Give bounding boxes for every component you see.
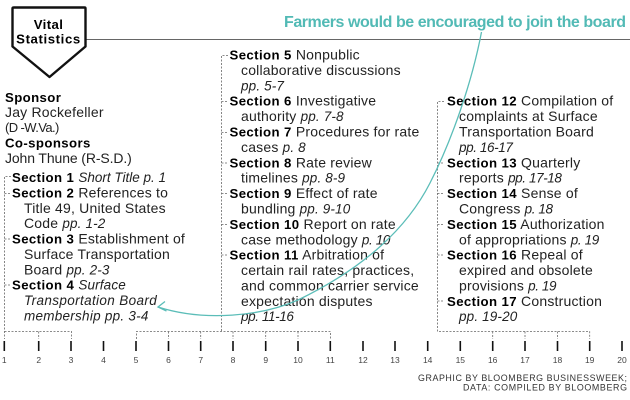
page axis numbers: 19 [585, 355, 595, 365]
section list: column 2: certain rail rates, practices, [241, 262, 414, 278]
sponsors block: Jay Rockefeller [5, 104, 104, 120]
section list: column 2: Section 11 Arbitration of [230, 247, 384, 263]
page axis numbers: 14 [423, 355, 433, 365]
credit line: GRAPHIC BY BLOOMBERG BUSINESSWEEK; [418, 373, 627, 383]
credit line: DATA: COMPILED BY BLOOMBERG [463, 382, 627, 392]
section list: column 2: Section 10 Report on rate [230, 216, 396, 232]
sponsors block: Sponsor [5, 90, 61, 105]
section list: column 3: Section 16 Repeal of [447, 247, 583, 263]
section list: column 1: membership pp. 3-4 [24, 308, 149, 324]
section list: column 2: cases p. 8 [241, 139, 306, 155]
page axis numbers: 3 [69, 355, 74, 365]
badge: Vital Statistics [12, 8, 86, 77]
page axis numbers: 1 [2, 355, 7, 365]
section list: column 1: Board pp. 2-3 [24, 261, 110, 277]
page axis numbers: 17 [520, 355, 530, 365]
badge: Vital Statistics: Statistics [16, 32, 81, 46]
section list: column 1: Section 2 References to [12, 184, 168, 200]
section list: column 2: Section 7 Procedures for rate [230, 124, 419, 140]
page axis numbers: 10 [293, 355, 303, 365]
section list: column 2: collaborative discussions [241, 62, 401, 78]
page axis numbers: 12 [358, 355, 368, 365]
section list: column 2: case methodology p. 10 [241, 231, 391, 247]
page axis numbers: 16 [488, 355, 498, 365]
page axis numbers: 7 [198, 355, 203, 365]
page axis numbers: 9 [263, 355, 268, 365]
page axis ticks [4, 341, 622, 351]
section list: column 3: Section 12 Compilation of [447, 93, 613, 109]
section list: column 2: bundling pp. 9-10 [241, 200, 351, 216]
section list: column 3: pp. 16-17 [458, 140, 513, 155]
bracket: column 2 to pages 5-11 [136, 56, 330, 339]
section list: column 3: of appropriations p. 19 [459, 231, 600, 247]
credit line [418, 373, 627, 392]
sponsors block [5, 90, 132, 166]
sponsors block: (D -W.Va.) [5, 120, 60, 135]
section list: column 2: timelines pp. 8-9 [241, 170, 346, 186]
section list: column 1: Transportation Board [24, 293, 157, 308]
page axis numbers: 6 [166, 355, 171, 365]
badge: Vital Statistics: Vital [34, 17, 63, 32]
section list: column 1: Title 49, United States [24, 200, 166, 216]
section list: column 2: pp. 5-7 [240, 78, 284, 93]
page axis numbers: 5 [134, 355, 139, 365]
section list: column 2: Section 5 Nonpublic [230, 46, 360, 62]
page axis numbers: 11 [326, 355, 335, 365]
section list: column 2 [230, 46, 419, 324]
section list: column 3: pp. 19-20 [458, 309, 518, 324]
page axis numbers [2, 355, 627, 365]
section list: column 1: Section 1 Short Title p. 1 [12, 169, 166, 185]
section list: column 3: Section 15 Authorization [447, 216, 605, 232]
section list: column 3: expired and obsolete [459, 262, 593, 278]
bracket: column 3 to pages 12-19 [438, 102, 590, 339]
page axis numbers: 8 [231, 355, 236, 365]
section list: column 2: expectation disputes [241, 293, 373, 309]
section list: column 3: reports pp. 17-18 [459, 170, 562, 186]
bracket: column 1 to pages 1-3 [4, 176, 72, 339]
section list: column 1: Surface Transportation [24, 246, 170, 262]
section list: column 3: complaints at Surface [459, 108, 598, 124]
section list: column 1: Code pp. 1-2 [24, 215, 106, 231]
section list: column 2: pp. 11-16 [240, 309, 294, 324]
page axis numbers: 15 [456, 355, 465, 365]
section list: column 2: and common carrier service [241, 278, 419, 294]
callout heading: Farmers would be encouraged to join the board [284, 14, 626, 31]
section list: column 1: Section 4 Surface [12, 277, 126, 293]
page axis numbers: 20 [617, 355, 627, 365]
section list: column 3: Transportation Board [459, 124, 594, 140]
section list: column 2: authority pp. 7-8 [241, 108, 344, 124]
section list: column 3: Section 13 Quarterly [447, 154, 580, 170]
section list: column 2: Section 8 Rate review [230, 154, 373, 170]
arrow: farmers callout to Section 4 [158, 32, 482, 316]
section list: column 1 [12, 169, 185, 324]
page axis numbers: 2 [36, 355, 41, 365]
section list: column 3: Section 17 Construction [447, 293, 602, 309]
page axis numbers: 18 [553, 355, 562, 365]
section list: column 3: Congress p. 18 [459, 200, 554, 216]
header rule [85, 38, 630, 40]
section list: column 2: Section 9 Effect of rate [230, 185, 378, 201]
section list: column 3: provisions p. 19 [459, 278, 557, 294]
sponsors block: Co-sponsors [5, 136, 91, 150]
section list: column 1: Section 3 Establishment of [12, 230, 185, 246]
section list: column 2: Section 6 Investigative [230, 93, 376, 109]
section list: column 3 [447, 93, 613, 324]
page axis numbers: 4 [101, 355, 106, 365]
page axis numbers: 13 [390, 355, 400, 365]
section list: column 3: Section 14 Sense of [447, 185, 578, 201]
sponsors block: John Thune (R-S.D.) [5, 150, 132, 166]
